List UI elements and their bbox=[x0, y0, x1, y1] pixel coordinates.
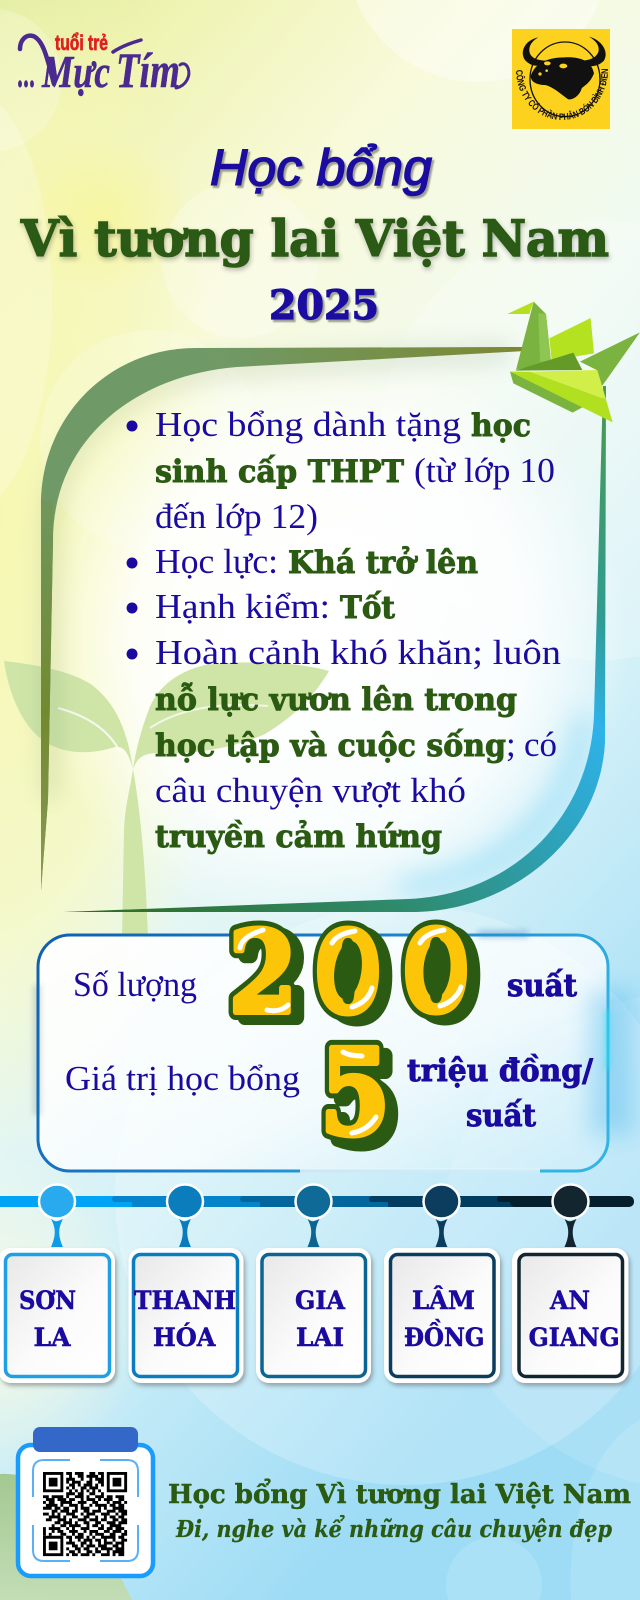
timeline node 5 bbox=[552, 1184, 588, 1247]
bottom-left leaf bbox=[0, 1474, 132, 1600]
title: 2025: 2025 bbox=[269, 282, 379, 329]
card: Thanh Hóa: HÓA bbox=[153, 1323, 216, 1352]
eligibility list bbox=[126, 405, 561, 855]
item: grade level: học bbox=[471, 408, 531, 444]
item: conduct: Tốt bbox=[340, 589, 396, 626]
card: Sơn La: LA bbox=[34, 1323, 71, 1352]
card: Lâm Đồng: ĐỒNG bbox=[404, 1320, 484, 1352]
logo: Tuổi Trẻ Mực Tím bbox=[17, 32, 189, 98]
timeline node 3 bbox=[296, 1184, 332, 1247]
label: Số lượng: Số lượng bbox=[73, 965, 197, 1004]
logo: Tuổi Trẻ Mực Tím: Mực bbox=[41, 46, 110, 97]
big number 200: 0 bbox=[403, 907, 469, 1038]
footer title: Học bổng Vì tương lai Việt Nam bbox=[168, 1478, 631, 1510]
card: Thanh Hóa: THANH bbox=[134, 1286, 236, 1315]
origami crane bbox=[507, 302, 640, 422]
item: grade level bbox=[155, 405, 555, 536]
card: An Giang: AN bbox=[549, 1286, 590, 1315]
big number 200 bbox=[229, 907, 478, 1044]
item: academic: Học lực: bbox=[155, 542, 278, 581]
item: circumstances bbox=[155, 633, 561, 855]
item: conduct: Hạnh kiểm: bbox=[155, 587, 330, 626]
big number 200: 0 bbox=[403, 907, 469, 1038]
item: circumstances: có bbox=[524, 725, 557, 764]
QR card bbox=[18, 1427, 153, 1576]
big number 200: 0 bbox=[324, 913, 390, 1044]
big number 5: 5 bbox=[320, 1023, 390, 1162]
unit: triệu đồng / suất: suất bbox=[466, 1097, 537, 1134]
unit: triệu đồng / suất: triệu đồng/ bbox=[407, 1052, 594, 1089]
title: Học bổng: Học bổng bbox=[210, 139, 432, 196]
card: An Giang bbox=[512, 1248, 628, 1383]
timeline node 4 bbox=[424, 1184, 460, 1247]
unit: suất: suất bbox=[507, 967, 578, 1004]
item: grade level: sinh cấp THPT bbox=[155, 453, 404, 490]
logo: Tuổi Trẻ Mực Tím: ... bbox=[17, 48, 35, 97]
item: circumstances: nỗ lực vươn lên trong bbox=[155, 681, 517, 718]
label: Giá trị học bổng: Giá trị học bổng bbox=[65, 1059, 300, 1098]
item: circumstances: câu chuyện vượt khó bbox=[155, 771, 466, 810]
card: Gia Lai bbox=[256, 1248, 371, 1383]
big number 200: 0 bbox=[315, 908, 381, 1039]
item: circumstances: truyền cảm hứng bbox=[155, 818, 442, 855]
big number 200: 2 bbox=[238, 913, 306, 1044]
big number 5: 5 bbox=[320, 1023, 390, 1162]
timeline bar bbox=[0, 1196, 634, 1207]
big number 200: 2 bbox=[229, 908, 297, 1039]
logo: Tuổi Trẻ Mực Tím: tuổi trẻ bbox=[55, 32, 108, 55]
big number 200: 0 bbox=[315, 908, 381, 1039]
QR code bbox=[43, 1473, 127, 1555]
item: grade level: Học bổng dành tặng bbox=[155, 405, 461, 444]
item: academic: Khá trở lên bbox=[288, 545, 478, 581]
item: academic bbox=[155, 542, 478, 581]
item: circumstances: Hoàn cảnh khó khăn; luôn bbox=[155, 633, 561, 672]
card: Gia Lai: LAI bbox=[296, 1323, 344, 1352]
item: circumstances: ; bbox=[506, 725, 516, 764]
unit: triệu đồng / suất bbox=[407, 1052, 594, 1134]
logo: Bình Điền buffalo: CÔNG TY CỔ PHẦN PHÂN BÓN BÌNH ĐIỀN bbox=[516, 69, 608, 120]
card: Lâm Đồng: LÂM bbox=[412, 1286, 475, 1315]
big number 200: 0 bbox=[412, 912, 478, 1043]
bullets bbox=[126, 420, 138, 660]
panel: quantity and value bbox=[33, 907, 634, 1172]
big number 200: 2 bbox=[229, 908, 297, 1039]
item: conduct bbox=[155, 587, 396, 626]
title: Vì tương lai Việt Nam: Vì tương lai Việt Nam bbox=[20, 209, 609, 268]
plant behind the list bbox=[4, 661, 329, 939]
timeline node 1 bbox=[39, 1184, 75, 1247]
item: grade level: (từ lớp 10 bbox=[414, 451, 555, 490]
big number 5: 5 bbox=[329, 1031, 399, 1170]
card: Sơn La: SƠN bbox=[19, 1286, 76, 1315]
timeline node 2 bbox=[167, 1184, 203, 1247]
item: circumstances: học tập và cuộc sống bbox=[155, 727, 506, 764]
card: Thanh Hóa bbox=[128, 1248, 244, 1383]
frame around eligibility list bbox=[41, 347, 606, 912]
item: grade level: đến lớp 12) bbox=[155, 497, 318, 536]
card: Sơn La bbox=[0, 1248, 115, 1383]
logo: Tuổi Trẻ Mực Tím: Tím bbox=[116, 42, 180, 98]
card: Lâm Đồng bbox=[384, 1248, 500, 1383]
card: Gia Lai: GIA bbox=[295, 1286, 346, 1315]
card: An Giang: GIANG bbox=[529, 1323, 620, 1352]
logo: Bình Điền buffalo bbox=[512, 29, 610, 129]
